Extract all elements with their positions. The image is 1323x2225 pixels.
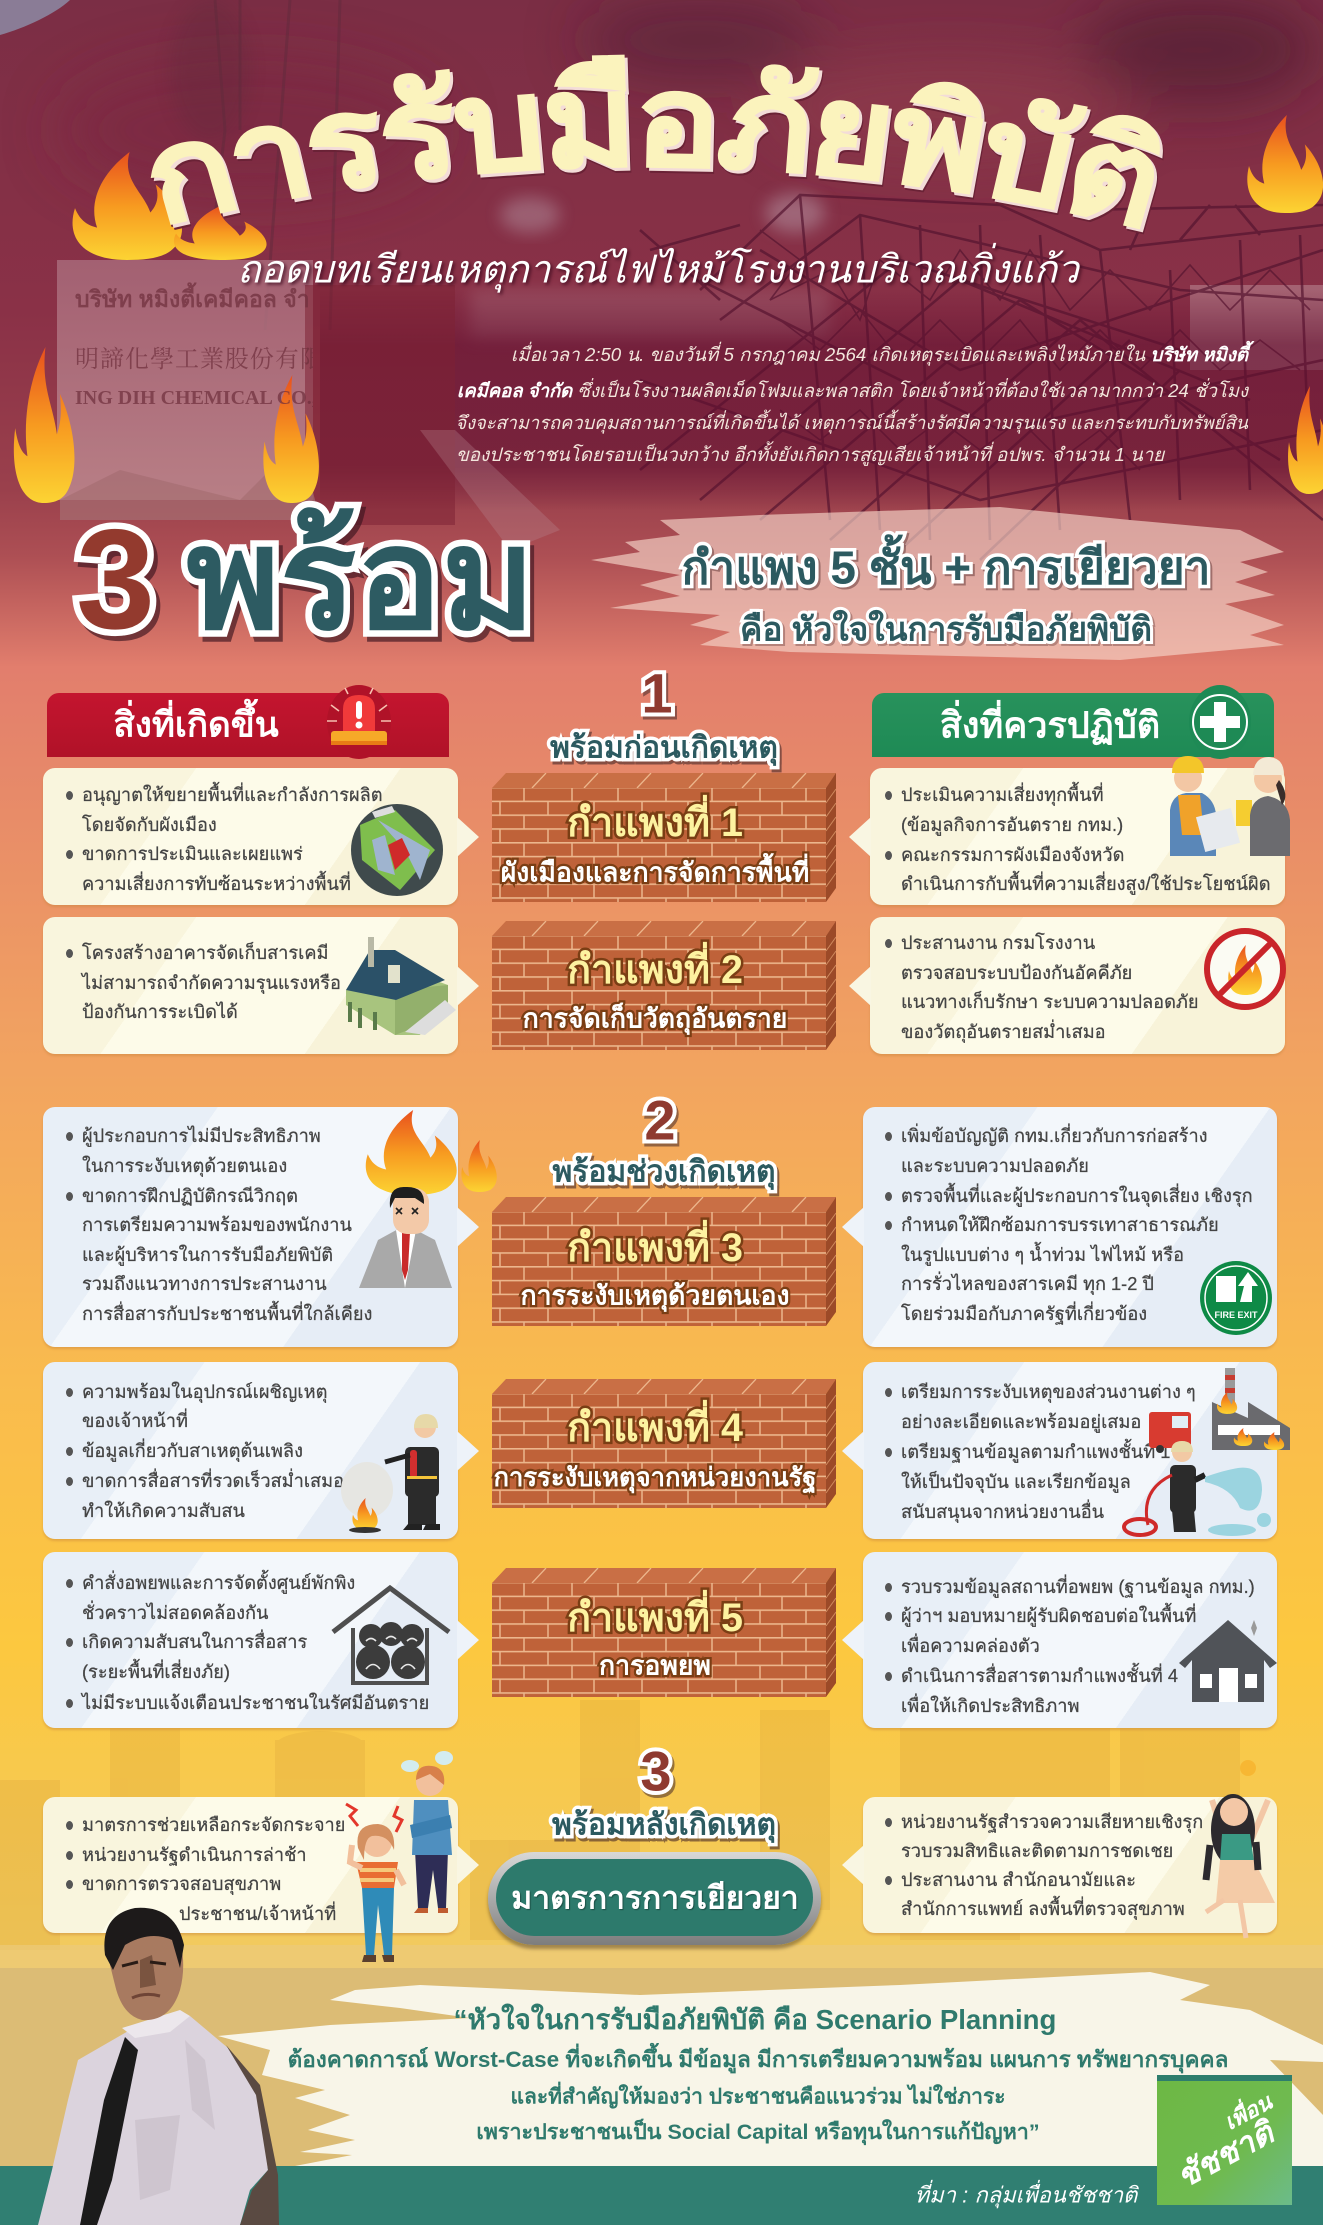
icon: burning factory [1149,1368,1290,1453]
intro paragraph: เคมีคอล จำกัด ซึ่งเป็นโรงงานผลิตเม็ดโฟมและพลาสติก โดยเจ้าหน้าที่ต้องใช้เวลามากกว่า 24 ชั่วโมง [457,380,1248,401]
card: storage problem: ป้องกันการระเบิดได้ [82,1002,238,1022]
card: land use action [870,768,1285,905]
card: self response problem: รวมถึงแนวทางการประสานงาน [82,1274,327,1294]
card: self response action: กำหนดให้ฝึกซ้อมการบรรเทาสาธารณภัย [901,1215,1219,1235]
card: self response problem: การเตรียมความพร้อมของพนักงาน [82,1215,352,1235]
icon: stressed man on fire [359,1110,497,1288]
section label 1: พร้อมก่อนเกิดเหตุ [550,732,778,764]
icon: firefighter with extinguisher [341,1414,440,1533]
card: state response problem [43,1362,458,1539]
section number 3: 3 [640,1740,672,1802]
subheading: คือ หัวใจในการรับมือภัยพิบัติ [740,612,1152,648]
card: self response action: เพิ่มข้อบัญญัติ กทม.เกี่ยวกับการก่อสร้าง [901,1126,1208,1146]
header: what should be done [872,693,1274,757]
icon: no fire [1207,931,1283,1007]
card: self response action: ในรูปแบบต่าง ๆ น้ำท่วม ไฟไหม้ หรือ [901,1245,1184,1265]
quote: และที่สำคัญให้มองว่า ประชาชนคือแนวร่วม ไม่ใช่ภาระ [510,2086,1006,2108]
card: evacuation problem [43,1552,458,1728]
card: evacuation action: เพื่อความคล่องตัว [901,1636,1040,1656]
card: state response action: เตรียมการระงับเหตุของส่วนงานต่าง ๆ [901,1382,1196,1402]
pill: remedy measures: มาตรการการเยียวยา [511,1880,799,1916]
logo: friends of Chadchart [1157,2075,1292,2205]
card: state response problem: ของเจ้าหน้าที่ [82,1411,188,1431]
card: land use action: (ข้อมูลกิจการอันตราย กทม.) [901,815,1123,835]
section label 3: พร้อมหลังเกิดเหตุ [552,1808,776,1842]
dark band behind paragraph [320,290,1323,510]
card: self response problem: ในการระงับเหตุด้วยตนเอง [82,1156,287,1176]
section label 2: พร้อมช่วงเกิดเหตุ [553,1156,775,1188]
card: land use action: ดำเนินการกับพื้นที่ความเสี่ยงสูง/ใช้ประโยชน์ผิด [901,874,1271,894]
card: state response action: ให้เป็นปัจจุบัน และเรียกข้อมูล [901,1472,1131,1492]
card: land use problem: อนุญาตให้ขยายพื้นที่และกำลังการผลิต [82,785,383,805]
card: self response action: การรั่วไหลของสารเคมี ทุก 1-2 ปี [901,1274,1154,1294]
wall 4 [491,1379,836,1508]
brush behind wall title [591,507,1284,660]
icon: chemical building [346,937,456,1035]
card: self response problem: ผู้ประกอบการไม่มีประสิทธิภาพ [82,1126,321,1146]
card: evacuation problem: เกิดความสับสนในการสื่อสาร [82,1632,307,1652]
photo: man in white shirt [38,1908,279,2225]
card: storage action: แนวทางเก็บรักษา ระบบความปลอดภัย [901,992,1199,1012]
icon: house with sad faces [333,1588,449,1683]
card: remedy problem [43,1797,458,1933]
card: storage action: ของวัตถุอันตรายสม่ำเสมอ [901,1022,1106,1042]
icon: firefighter with hose [1124,1441,1271,1536]
card: state response problem: ทำให้เกิดความสับสน [82,1501,245,1521]
smoke [60,0,1320,200]
card: self response action: และระบบความปลอดภัย [901,1156,1089,1176]
wall 5: กำแพงที่ 5 [567,1596,743,1640]
icon: dark house [1179,1620,1277,1702]
card: evacuation problem: ไม่มีระบบแจ้งเตือนประชาชนในรัศมีอันตราย [82,1693,429,1713]
wall 5: การอพยพ [599,1650,711,1680]
sign [57,260,313,500]
card: storage action: ตรวจสอบระบบป้องกันอัคคีภัย [901,963,1132,983]
tree and poles [210,0,340,330]
header: what happened [47,693,449,757]
section number 2: 2 [644,1088,676,1152]
card: self response action: โดยร่วมมือกับภาครัฐที่เกี่ยวข้อง [901,1304,1147,1324]
card: evacuation action [863,1552,1277,1728]
card: self response problem [43,1107,458,1347]
card: remedy action [863,1797,1277,1933]
card: remedy action: หน่วยงานรัฐสำรวจความเสียหายเชิงรุก [901,1812,1203,1832]
wall 3 [492,1197,836,1326]
wall 1 [492,773,836,902]
wall 2: กำแพงที่ 2 [567,948,743,992]
section number 1: 1 [641,662,673,724]
card: state response problem: ขาดการสื่อสารที่รวดเร็วสม่ำเสมอ [82,1471,344,1491]
icon: fire exit: FIRE EXIT [1214,1310,1258,1320]
wall 4: การระงับเหตุจากหน่วยงานรัฐ [494,1464,816,1492]
card: state response action: อย่างละเอียดและพร้อมอยู่เสมอ [901,1412,1141,1432]
ruined city [0,1640,1240,1950]
card: state response problem: ความพร้อมในอุปกรณ์เผชิญเหตุ [82,1382,327,1402]
card: remedy action: ประสานงาน สำนักอนามัยและ [901,1870,1136,1890]
intro paragraph: จึงจะสามารถควบคุมสถานการณ์ที่เกิดขึ้นได้ เหตุการณ์นี้สร้างรัศมีความรุนแรง และกระทบกับทรัพย์สิน [455,412,1248,433]
wall 2 [492,921,836,1050]
source: ที่มา : กลุ่มเพื่อนชัชชาติ [915,2182,1137,2208]
icon: city map [351,804,443,896]
card: state response action [863,1362,1277,1539]
logo: friends of Chadchart: เพื่อน [1220,2089,1276,2135]
card: self response action [863,1107,1277,1347]
card: self response action: ตรวจพื้นที่และผู้ประกอบการในจุดเสี่ยง เชิงรุก [901,1186,1253,1206]
sign text: ING DIH CHEMICAL CO., [75,387,313,409]
card: self response problem: และผู้บริหารในการรับมือภัยพิบัติ [82,1245,333,1265]
wall 1: ผังเมืองและการจัดการพื้นที่ [501,858,809,888]
card: self response problem: ขาดการฝึกปฏิบัติกรณีวิกฤต [82,1186,298,1206]
sign text: บริษัท หมิงตี้เคมีคอล จำ [75,286,310,312]
header: what should be done: สิ่งที่ควรปฏิบัติ [940,704,1160,746]
card: remedy action: รวบรวมสิทธิและติดตามการชดเชย [901,1841,1173,1861]
cream quote brush [218,1972,1323,2166]
wall 3: กำแพงที่ 3 [567,1226,743,1270]
card: evacuation problem: ชั่วคราวไม่สอดคล้องกัน [82,1603,268,1623]
logo: friends of Chadchart: ชัชชาติ [1170,2114,1279,2195]
subtitle: ถอดบทเรียนเหตุการณ์ไฟไหม้โรงงานบริเวณกิ่งแก้ว [237,248,1079,292]
icon: plus [1192,685,1248,759]
card: remedy problem: มาตรการช่วยเหลือกระจัดกระจาย [82,1815,345,1835]
card: state response action: สนับสนุนจากหน่วยงานอื่น [901,1502,1104,1522]
card: land use problem: ความเสี่ยงการทับซ้อนระหว่างพื้นที่ [82,874,351,894]
quote: “หัวใจในการรับมือภัยพิบัติ คือ Scenario Planning [454,2004,1056,2035]
icon: alarm [327,685,391,759]
wall 1: กำแพงที่ 1 [567,801,743,845]
intro paragraph: ของประชาชนโดยรอบเป็นวงกว้าง อีกทั้งยังเกิดการสูญเสียเจ้าหน้าที่ อปพร. จำนวน 1 นาย [456,444,1164,465]
icon: cheerful woman [1206,1760,1275,1938]
card: evacuation problem: คำสั่งอพยพและการจัดตั้งศูนย์พักพิง [82,1573,355,1593]
icon: engineers [1170,756,1290,856]
card: evacuation action: รวบรวมข้อมูลสถานที่อพยพ (ฐานข้อมูล กทม.) [901,1577,1255,1597]
card: land use problem: ขาดการประเมินและเผยแพร่ [82,844,303,864]
card: remedy problem: ขาดการตรวจสอบสุขภาพ [82,1874,281,1894]
quote [288,2004,1228,2146]
pill: remedy measures [488,1852,821,1945]
card: evacuation action: ผู้ว่าฯ มอบหมายผู้รับผิดชอบต่อในพื้นที่ [901,1606,1196,1626]
card: state response problem: ข้อมูลเกี่ยวกับสาเหตุต้นเพลิง [82,1441,303,1461]
card: remedy problem: หน่วยงานรัฐดำเนินการล่าช้า [82,1845,307,1865]
sign text [75,282,313,409]
card: self response problem: การสื่อสารกับประชาชนพื้นที่ใกล้เคียง [82,1304,372,1324]
quote: เพราะประชาชนเป็น Social Capital หรือทุนในการแก้ปัญหา” [476,2120,1040,2144]
wall 3: การระงับเหตุด้วยตนเอง [521,1280,789,1310]
card: land use action: คณะกรรมการผังเมืองจังหวัด [901,845,1124,865]
wall 5 [492,1568,836,1697]
card: state response action: เตรียมฐานข้อมูลตามกำแพงชั้นที่ 1 [901,1442,1170,1462]
card: storage action [870,917,1285,1054]
card: storage problem: ไม่สามารถจำกัดความรุนแรงหรือ [82,973,341,993]
heading: walls and remedy: กำแพง 5 ชั้น + การเยียวยา [682,542,1210,594]
card: land use problem [43,768,458,905]
card: evacuation action: ดำเนินการสื่อสารตามกำแพงชั้นที่ 4 [901,1666,1178,1686]
heading: 3 prepared: 3 พร้อม [76,500,535,659]
card: storage problem: โครงสร้างอาคารจัดเก็บสารเคมี [82,943,329,963]
icon: upset couple [346,1751,453,1962]
card: remedy problem: ประชาชน/เจ้าหน้าที่ [179,1904,336,1924]
wall 4: กำแพงที่ 4 [567,1406,743,1450]
title: การรับมือภัยพิบัติ [150,54,1164,234]
card: storage action: ประสานงาน กรมโรงงาน [901,933,1095,953]
intro paragraph [455,340,1254,466]
wall 2: การจัดเก็บวัตถุอันตราย [523,1004,787,1034]
card: evacuation action: เพื่อให้เกิดประสิทธิภาพ [901,1696,1080,1716]
card: land use problem: โดยจัดกับผังเมือง [82,815,217,835]
quote: ต้องคาดการณ์ Worst-Case ที่จะเกิดขึ้น มีข้อมูล มีการเตรียมความพร้อม แผนการ ทรัพยากรบุคคล [288,2047,1228,2072]
icon: fire exit [1200,1261,1272,1335]
intro paragraph: เมื่อเวลา 2:50 น. ของวันที่ 5 กรกฎาคม 2564 เกิดเหตุระเบิดและเพลิงไหม้ภายใน บริษัท หมิงตี้ [511,344,1248,365]
card: evacuation problem: (ระยะพื้นที่เสี่ยงภัย) [82,1662,230,1682]
wrecked structure [640,195,1323,560]
card: storage problem [43,917,458,1054]
card: remedy action: สำนักการแพทย์ ลงพื้นที่ตรวจสุขภาพ [901,1899,1185,1919]
header: what happened: สิ่งที่เกิดขึ้น [113,706,279,744]
card: land use action: ประเมินความเสี่ยงทุกพื้นที่ [901,785,1104,805]
